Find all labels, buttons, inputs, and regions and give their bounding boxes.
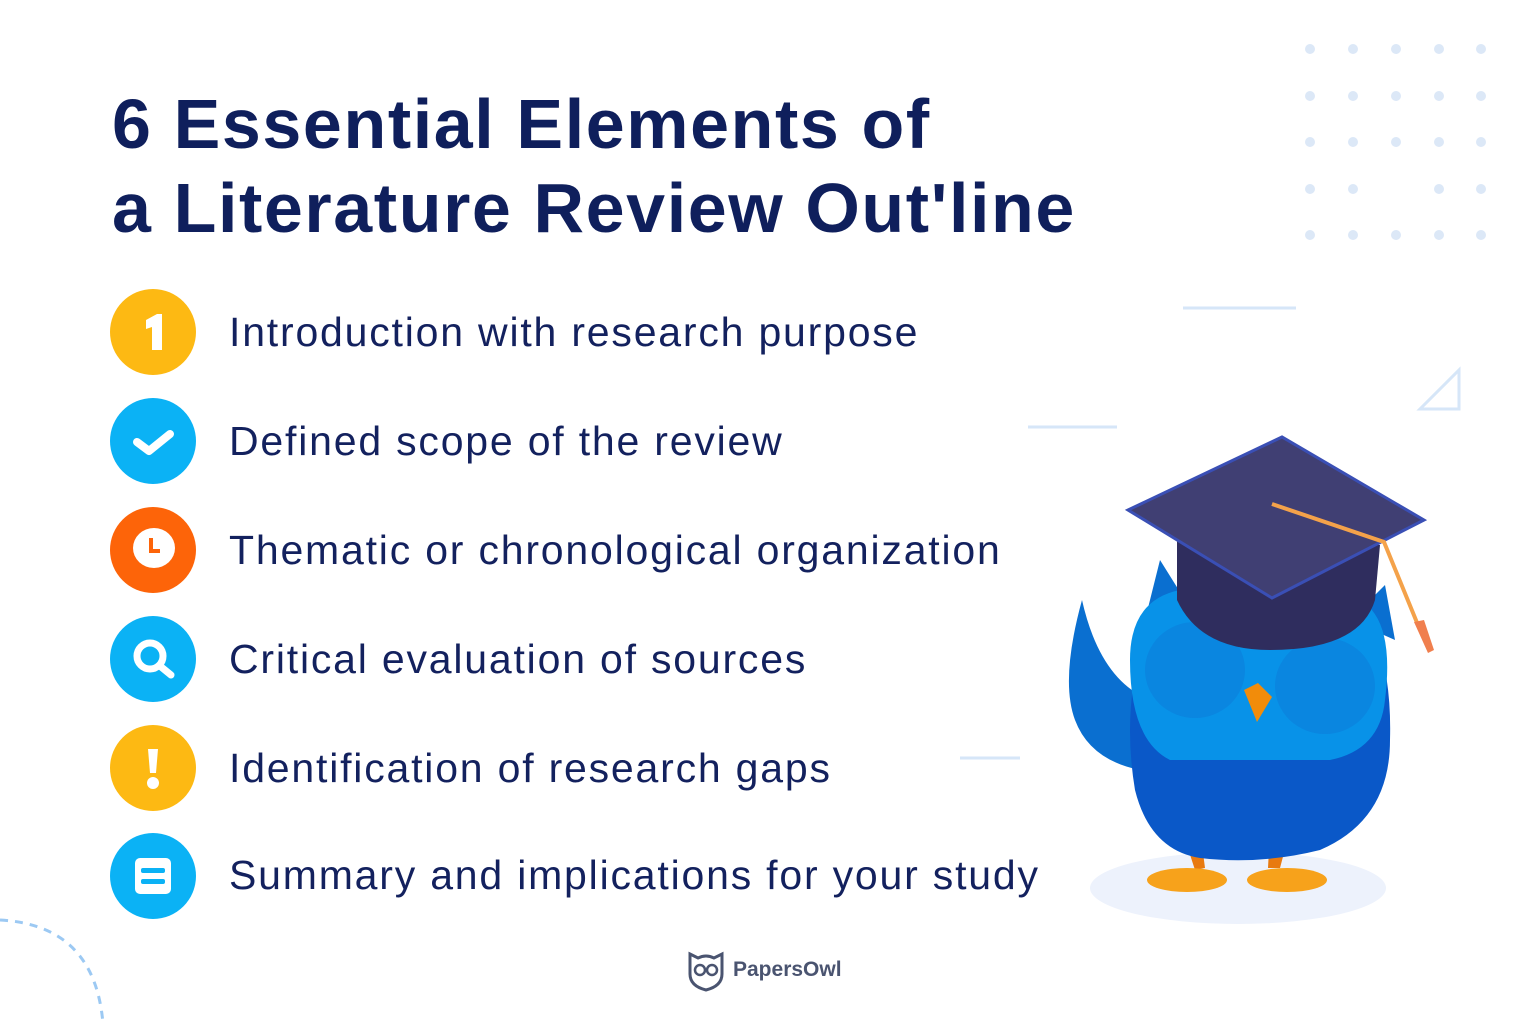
item 4 text: Critical evaluation of sources: [229, 636, 807, 682]
wing: [1069, 600, 1150, 770]
face: [1130, 590, 1387, 760]
body: [1130, 620, 1390, 860]
feet: [1147, 868, 1227, 892]
item 5 text: Identification of research gaps: [229, 745, 832, 791]
icon: exclamation: [110, 725, 196, 811]
item 6 text: Summary and implications for your study: [229, 852, 1040, 898]
title: [112, 85, 1076, 247]
item 3 text: Thematic or chronological organization: [229, 527, 1002, 573]
item 1 text: Introduction with research purpose: [229, 309, 919, 355]
owl illustration: [1068, 435, 1434, 924]
cap: [1177, 540, 1380, 650]
logo: PapersOwl: PapersOwl: [733, 958, 842, 981]
icon list: [110, 289, 196, 919]
icon: check: [110, 398, 196, 484]
ears: [1145, 560, 1395, 640]
title: 6 Essential Elements of: [112, 85, 931, 163]
icon: clock: [110, 507, 196, 593]
item 2 text: Defined scope of the review: [229, 418, 784, 464]
legs: [1182, 830, 1290, 870]
title: a Literature Review Out'line: [112, 169, 1076, 247]
logo: PapersOwl: [688, 952, 842, 992]
icon: magnifier: [110, 616, 196, 702]
icon: document: [110, 833, 196, 919]
icon: number 1: [110, 289, 196, 375]
